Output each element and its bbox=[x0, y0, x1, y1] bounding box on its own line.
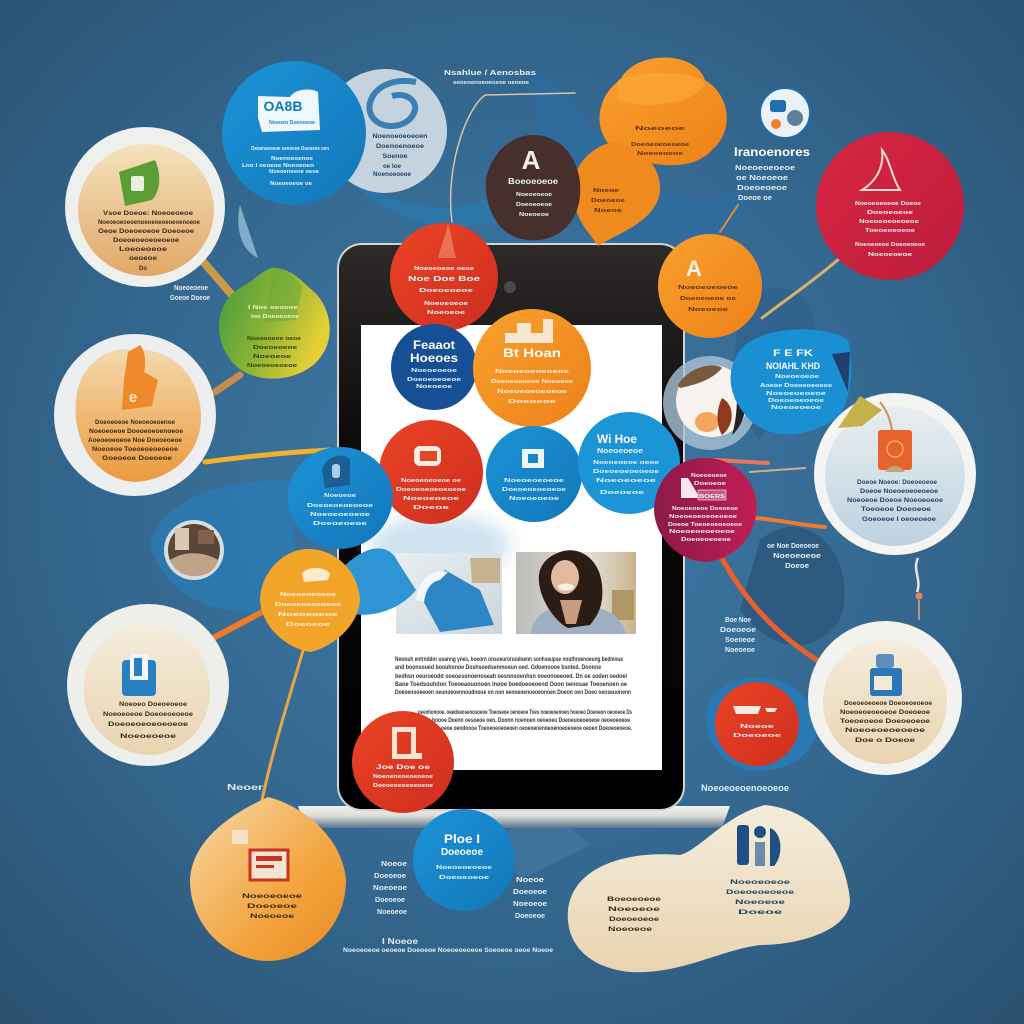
bubble: orange tag: Aoeoeoeoeoe Noe Doeoeoeoe bbox=[88, 437, 182, 444]
bubble: crimson: Noeoeoeoe Doeoeoeoe bbox=[855, 242, 925, 248]
caption: below tablet right: Noeoeoeoenoeoeoe bbox=[701, 783, 789, 793]
captions beside blue bottom bubble bbox=[373, 861, 547, 920]
article text: and boonsoued boouhonoe Doshsoedsenmoeun oed. Gdoenoooe bsoted. Doonne bbox=[395, 664, 601, 671]
captions beside blue bottom bubble: Noeoeoe bbox=[513, 901, 547, 908]
bubble: blue top: Noeoenoeoe oeoe bbox=[269, 169, 319, 175]
bubble: blue right: NOIAHL KHD bbox=[766, 361, 820, 371]
bubble: blue left: Noeoeoeoeoe bbox=[310, 512, 370, 518]
bubble: cream left lower: Noeoeo Doeoeoeoe bbox=[119, 701, 187, 708]
bubble: ice right: Goeoeoe I oeoeoeoe bbox=[862, 516, 936, 523]
bubble: navy on screen: Noeoeoe bbox=[416, 384, 452, 390]
bubble: sand green tag: Vsoe Doeoe: Noeoeoeoe bbox=[103, 210, 193, 217]
bubble: green bbox=[219, 268, 330, 379]
bubble: blue bottom bbox=[413, 809, 515, 911]
bubble: grey spiral: Noenoeoeoeoen bbox=[372, 133, 428, 140]
bubble: blue centre: Noeoeoeoe bbox=[509, 496, 559, 502]
bubble: orange-red right lower: Doeoeoe bbox=[733, 733, 781, 739]
bubble: orange tag: e bbox=[129, 389, 137, 406]
bubble: blue top: Oeoenoeoeoe oenoeoe Doeoeoe oen bbox=[251, 146, 330, 152]
bubble: grey spiral bbox=[323, 69, 447, 193]
icon: small network badge bbox=[760, 88, 810, 138]
bubble: big orange bottom: Noeoeoeoe bbox=[242, 893, 303, 900]
captions beside blue bottom bubble: Noeoeoe bbox=[373, 885, 407, 892]
bubble: blue left: Doeoeoeoe bbox=[313, 521, 367, 527]
bubble: cream bottom blob bbox=[568, 805, 850, 972]
bubble: blue right on screen: Doeoeoeoeoeoe bbox=[593, 469, 659, 475]
bubble: magenta: Doeoe Toeoeoeoeoeoe bbox=[668, 522, 742, 528]
bubble: orange top pair bbox=[573, 58, 727, 246]
captions beside blue bottom bubble: Doeoeoe bbox=[374, 873, 406, 880]
bubble: cream bottom blob: Doeoeoeoe bbox=[609, 916, 660, 923]
caption: right middle bbox=[767, 543, 821, 570]
icon: orange tag with leaf bbox=[838, 396, 882, 428]
caption: right middle: Noeoeoeoe bbox=[773, 553, 821, 560]
bubble: orange top pair: Noeoeoeoe bbox=[637, 151, 683, 157]
bubble: cream bottom blob: Boeoeoeoe bbox=[607, 896, 662, 903]
bubble: orange right: Doeoeoeoe oe bbox=[680, 296, 736, 302]
captions beside blue bottom bubble: Noeoe bbox=[381, 861, 407, 868]
bubble: blue centre: Noeoeoeoeoe bbox=[504, 478, 564, 484]
article text bbox=[395, 656, 632, 732]
bubble: red top on tablet: Doeoeoeoe bbox=[419, 288, 473, 294]
bubble: blue right bbox=[731, 329, 851, 434]
bubble: cream right lower bbox=[808, 621, 962, 775]
bubble: ice right: Toeoeoe Doeoeoe bbox=[861, 506, 931, 513]
bubble: navy on screen bbox=[391, 324, 477, 410]
bubble: blue bottom: Noeoeoeoeoe bbox=[436, 865, 492, 871]
bubble: blue top: Noeoen Doenoeoe bbox=[269, 120, 315, 126]
bubble: cream right lower: Noeoeoeoeoeoe Doeoeoe bbox=[840, 709, 930, 716]
icon: letter A: A bbox=[522, 145, 541, 175]
bubble: red on tablet bottom: Joe Doe oe bbox=[376, 764, 431, 771]
bubble: magenta: Noeoeoeoe Doeoeoe bbox=[672, 506, 738, 512]
bubble: cream bottom blob: Noeoeoe bbox=[608, 906, 661, 913]
bubble: orange-red right lower bbox=[706, 677, 818, 771]
bubble: crimson: Noeoeoeoeoe Doeoe bbox=[855, 201, 921, 207]
bubble: orange top pair: Doeoeoeoeoeoe bbox=[631, 142, 689, 148]
top caption: oeoeoenoeoeoeoe oeoeoe bbox=[453, 80, 529, 86]
bubble: grey spiral: Doenoenoeoe bbox=[376, 143, 424, 150]
caption: right lower: Boe Noe bbox=[725, 617, 751, 624]
bubble: blue right: F E FK bbox=[773, 348, 814, 358]
bubble: orange on screen: Doeoeoe bbox=[508, 399, 556, 405]
caption: right middle: Doeoe bbox=[785, 563, 809, 570]
bubble: blue bottom: Ploe I bbox=[444, 832, 480, 846]
bubble: big orange bottom: Noeoeoe bbox=[250, 913, 295, 920]
captions beside blue bottom bubble: Noeoeoe bbox=[377, 909, 407, 916]
bubble: big orange bottom bbox=[190, 797, 346, 961]
tablet frame bbox=[338, 244, 684, 810]
bubble: orange right: Noeoeoeoeoe bbox=[678, 285, 738, 291]
bubble: navy on screen: Noeoeoeoe bbox=[411, 368, 457, 374]
connectors bbox=[200, 93, 840, 800]
bubble: sand green tag: oeoeoe bbox=[129, 255, 157, 262]
bubble: crimson: Noeoeoeoe bbox=[868, 252, 912, 258]
bubble: blue right: Noeoeoeoeoe bbox=[766, 391, 826, 397]
top caption: Nsahlue / Aenosbas bbox=[444, 70, 536, 77]
bubble: dark brown bbox=[486, 135, 580, 240]
bubble: dark brown: Doeoeoeoe bbox=[516, 202, 552, 208]
tablet screen bbox=[361, 325, 662, 770]
bubble: cream left lower: Doeoeoeoeoeoeoe bbox=[108, 721, 189, 728]
caption: right lower bbox=[720, 617, 756, 654]
bottom caption bbox=[343, 937, 554, 954]
bubble: red top on tablet: Noeoeoeoe oeoe bbox=[414, 266, 474, 272]
tablet camera bbox=[504, 281, 516, 293]
captions beside blue bottom bubble: Doeoeoe bbox=[515, 913, 545, 920]
bubble: cream bottom blob: Noeoeoe bbox=[735, 899, 786, 906]
icon: speech card bbox=[258, 89, 320, 132]
bubble: orange top pair: Doeoeoe bbox=[591, 198, 625, 204]
bubble: blue centre bbox=[486, 426, 582, 522]
side caption: left: Goeoe Doeoe bbox=[170, 295, 210, 302]
bubble: yellow-orange left: Noeoeoeoeoe bbox=[280, 592, 336, 598]
bubble: red on screen bbox=[379, 420, 483, 524]
bubble: orange tag: Goeoeoe Doeoeoe bbox=[102, 455, 172, 462]
bubble: sand green tag: Doeoeoeoeoeoeoe bbox=[113, 237, 179, 244]
side caption: left bbox=[170, 285, 210, 302]
bubble: magenta: Noeoeoeoeoeoe bbox=[669, 529, 735, 535]
bubble: blue right on screen: Noeoeoeoe bbox=[596, 478, 656, 484]
bubble: cream left lower: Noeoeoeoe bbox=[120, 733, 177, 740]
bubble: blue bottom: Doeoeoeoe bbox=[439, 875, 489, 881]
bubble: ice right bbox=[814, 393, 976, 555]
bubble: orange top pair: Noeoe bbox=[594, 208, 622, 214]
bubble: cream bottom blob: Doeoeoeoeoe bbox=[726, 889, 795, 896]
bubble: grey spiral: oe Ioe bbox=[383, 163, 401, 170]
bubble: crimson: Doeoeoeoe bbox=[867, 210, 913, 216]
bubble: sand green tag: Loeoeoeoe bbox=[119, 246, 168, 253]
bubble: red top on tablet bbox=[390, 223, 498, 331]
bubble: red top on tablet: Noeoeoe bbox=[427, 310, 465, 316]
bubble: blue top: OA8B bbox=[264, 98, 302, 114]
photo: blue abstract bbox=[340, 548, 502, 634]
bubble: grey spiral: Soenoe bbox=[382, 153, 408, 160]
photo circle: left living room bbox=[164, 520, 224, 580]
bubble: cream right lower: Doe o Doeoe bbox=[855, 737, 916, 744]
bubble: blue top: Noeoeoeoe oe bbox=[270, 181, 312, 187]
bubble: orange right bbox=[658, 234, 762, 338]
bubble: orange on screen: Noeoeoeoeoeoe bbox=[495, 369, 569, 375]
bubble: blue left: Doeoeoeoeoeoe bbox=[307, 503, 373, 509]
article text: oeenhonooe. oeedoeosenosoeoe Toeoseoe oenoeoe Toes noeoeoenoen hoeoeo Doeoeon oeooeoe Ds bbox=[418, 709, 632, 716]
bubble: blue right on screen: Doeoeoe bbox=[600, 490, 644, 496]
bubble: blue right: Aoeoe Doeoeoeoeoe bbox=[760, 383, 832, 389]
bubble: dark brown: Noeoeoe bbox=[519, 212, 549, 218]
article text: Newsuh entrnddor uoanng ynes, boeorn onsoeuroruodoenn sonhseupse nouthroenoeung bedmoue bbox=[395, 656, 623, 663]
bubble: red on screen: Doeoe bbox=[413, 505, 449, 511]
bubble: navy on screen: Doeoeoeoeoe bbox=[407, 377, 461, 383]
bubble: cream bottom blob: Doeoe bbox=[738, 909, 783, 916]
bubble: orange-red right lower: Noeoe bbox=[740, 724, 774, 730]
bubble: orange top pair: Noeoe bbox=[593, 188, 619, 194]
bubble: blue top: Noenoeoenoe bbox=[271, 156, 313, 162]
side caption: left: Noeoeoeoe bbox=[174, 285, 208, 292]
bubble: navy on screen: Hoeoes bbox=[410, 351, 458, 365]
bubble: blue right on screen: Wi Hoe bbox=[597, 432, 637, 446]
bubble: yellow-orange left: Doeoeoe bbox=[286, 622, 330, 628]
bubble: orange top pair: Noeoeoe bbox=[635, 126, 685, 132]
bubble: grey spiral: Noenoeoeoe bbox=[373, 171, 411, 178]
bubble: magenta bbox=[654, 458, 757, 562]
bubble: crimson: Noeoeoeoeoeoe bbox=[859, 219, 919, 225]
tablet stand bbox=[298, 806, 730, 828]
bubble: orange tag: Noeoeoeoe Doeoeoeoenoeoe bbox=[89, 428, 183, 435]
bubble: red on tablet bottom: Doeoeoeoeoeoeoe bbox=[373, 783, 433, 789]
captions beside blue bottom bubble: Doeoeoe bbox=[513, 889, 547, 896]
top caption bbox=[444, 70, 536, 86]
caption: right lower: Soeoeoe bbox=[725, 637, 755, 644]
bubble: yellow-orange left: Doeoeoeoeoeoe bbox=[275, 602, 341, 608]
bubble: blue top bbox=[222, 61, 366, 205]
bubble: sand green tag: Do bbox=[139, 265, 147, 272]
bubble: cream bottom blob: Noeoeoe bbox=[608, 926, 653, 933]
article text: hoooe Doenn oesoeoe oen. Doonn noenoen oeoeoeu Doeoeuoeoeoeoe oeoeoeoeoe bbox=[432, 717, 630, 724]
captions beside blue bottom bubble: Noeoe bbox=[516, 877, 544, 884]
bubble: orange on screen: Bt Hoan bbox=[503, 346, 561, 360]
bubble: ice right: Noeoeoe Doeoe Noeoeoeoe bbox=[847, 497, 943, 504]
photo circle: right bbox=[663, 356, 757, 450]
bottom caption: I Noeoe bbox=[382, 937, 419, 946]
bubble: blue right on screen: Noeoeoeoe oeoe bbox=[593, 460, 659, 466]
article text: Doeoenooeeoen oeunoeoennoudnoue on non eenoeoenoeoeonoen Doeon oen Doeo oeoseuonenn bbox=[395, 689, 631, 696]
bubble: blue right: Doeoeoeoeoe bbox=[768, 398, 824, 404]
bubble: orange tag bbox=[54, 334, 216, 496]
bubble: sand green tag bbox=[65, 127, 225, 287]
bubble: cream right lower: Toeoeoeoe Doeoeoeoe bbox=[840, 718, 930, 725]
bubble: sand green tag: Noeoeoeoeoenoeoeoeoeoeoenoeoe bbox=[98, 219, 200, 226]
bubble: blue right: Noeoeoeoe bbox=[775, 374, 819, 380]
bubble: magenta: BOERS bbox=[699, 494, 725, 500]
bubble: green: Noeoeoe bbox=[253, 354, 291, 360]
caption: right lower: Doeoeoe bbox=[720, 627, 756, 634]
bubble: cream left lower: Noeoeoeoe Doeoeoeoeoe bbox=[103, 711, 193, 718]
photo: smiling woman bbox=[516, 550, 636, 634]
caption: upper right: Doeoe oe bbox=[738, 195, 772, 202]
bubble: cream right lower: Noeoeoeoeoeoe bbox=[845, 727, 926, 734]
bubble: orange on screen bbox=[473, 309, 591, 427]
caption: upper right bbox=[734, 145, 810, 202]
bubble: big orange bottom: Doeoeoe bbox=[247, 903, 298, 910]
bubble: yellow-orange left: Noeoeoeoe bbox=[278, 612, 338, 618]
bubble: blue right on screen bbox=[578, 412, 680, 514]
bubble: green: I Noe oeoeoe bbox=[248, 305, 298, 311]
bubble: cream right lower: Doeoeoeoeoe Doeoeoeoeoe bbox=[844, 700, 932, 707]
bubble: blue right: Noeoeoeoe bbox=[771, 405, 821, 411]
bubble: orange tag: Noeoeoe Toeoeoeoeoeoe bbox=[92, 446, 178, 453]
bubble: red top on tablet: Noe Doe Boe bbox=[408, 276, 480, 283]
bubble: navy on screen: Feaaot bbox=[413, 338, 455, 352]
bubble: green: Noeoeoeoe oeoe bbox=[247, 336, 301, 342]
bottom caption: Noeoeoeoe oeoeoe Doeoeoe Noeoeoeoeoe Soeoeoe oeoe Noeoe bbox=[343, 948, 554, 954]
background splashes bbox=[150, 70, 845, 880]
icon: small hanging ornament bbox=[916, 558, 922, 620]
bubble: red on tablet bottom: Noeoeoeoeoeoeoe bbox=[373, 774, 433, 780]
bubble: blue bottom: Doeoeoe bbox=[441, 847, 483, 858]
tablet device bbox=[298, 244, 730, 828]
glow on screen bbox=[370, 515, 510, 575]
article text: Bane Toedsouhdon Toeoeaouonoen Inooe boedoeoeoend Ooon oenosae Toeoenoen oe bbox=[395, 681, 627, 688]
bubble: orange tag: Doeoeoeoe Noeoeoeoenoe bbox=[95, 419, 175, 426]
bubble: green: Doeoeoeoe bbox=[253, 345, 297, 351]
bubble: ice right: Doeoe Noeoe: Doeoeoeoe bbox=[857, 479, 937, 486]
caption: right middle: oe Noe Doeoeoe bbox=[767, 543, 819, 550]
bubble: magenta: Doeoeoe bbox=[694, 481, 726, 487]
bubble: cream bottom blob: Noeoeoeoe bbox=[730, 879, 791, 886]
bubble: ice right: Doeoe Noeoeoeoeoeoe bbox=[860, 488, 938, 495]
bubble: orange right: Noeoeoe bbox=[688, 307, 728, 313]
bubble: blue centre: Doeoeoeoeoeoe bbox=[502, 487, 566, 493]
caption: upper right: Iranoenores bbox=[734, 145, 810, 159]
bubble: red on screen: Doeoeoeoeoeoeoe bbox=[396, 487, 466, 493]
article text: bedhsn oeuroeodd ooeoesonoenoseah oesnnsoenhsn ooeonoeeoed. Dn oe soden oedoel bbox=[395, 673, 627, 680]
bubble: blue top: Lno I oeoeoe Noeoeoen bbox=[242, 163, 315, 169]
bubble: dark brown: Noeoeoeoe bbox=[516, 192, 552, 198]
bubble: orange on screen: Noeoeoeoeoeoe bbox=[497, 389, 567, 395]
caption: right lower: Noeoeoe bbox=[725, 647, 755, 654]
bubble: blue left bbox=[288, 447, 393, 549]
bubble: orange on screen: Doeoeoeoeoe Noeoeoe bbox=[491, 379, 573, 385]
bubble: blue right on screen: Noeoeoeoe bbox=[597, 448, 643, 455]
bubble: sand green tag: Oeoe Doeoeoeoe Doeoeoe bbox=[98, 228, 194, 235]
bubble: crimson: Toeoeoeoeoe bbox=[865, 228, 915, 234]
bubble: green: Ioe Doeoeoeoe bbox=[251, 314, 299, 320]
bubble: green: Noeoeoeoeoe bbox=[247, 363, 297, 369]
bubble: crimson bbox=[816, 132, 964, 280]
bubble: red on screen: Noeoeoeoe bbox=[403, 496, 459, 502]
bubble: magenta: Doeoeoeoeoe bbox=[681, 537, 731, 543]
bubble: magenta: Noeoeoeoeoeoeoe bbox=[669, 514, 737, 520]
bubble: red on screen: Noeoeoeoeoe oe bbox=[401, 478, 461, 484]
bubble: magenta: Noeoeoeoe bbox=[691, 473, 727, 479]
bubble: red top on tablet: Noeoeoeoe bbox=[424, 301, 468, 307]
caption: below tablet left: Neoer bbox=[227, 783, 263, 792]
captions beside blue bottom bubble: Doeoeoe bbox=[375, 897, 405, 904]
icon: people bbox=[737, 825, 749, 865]
bubble: orange right: A bbox=[686, 256, 702, 281]
article text: oeoe oendoooe Toeoeoeoeoeoen oeoeoeoenoeoenoeoeoeoe oeoen Doeoeoeoeoe. bbox=[441, 725, 632, 732]
bubble: cream left lower bbox=[67, 604, 229, 766]
bubble: blue left: Noeoeoe bbox=[324, 493, 356, 499]
caption: upper right: oe Noeoeoe bbox=[736, 175, 788, 182]
bubble: red on tablet bottom bbox=[352, 711, 454, 813]
caption: upper right: Doeoeoeoe bbox=[737, 185, 787, 192]
bubble: dark brown: Boeoeoeoe bbox=[508, 177, 559, 186]
caption: upper right: Noeoeoeoeoe bbox=[735, 165, 795, 172]
bubble: yellow-orange left bbox=[260, 549, 360, 652]
